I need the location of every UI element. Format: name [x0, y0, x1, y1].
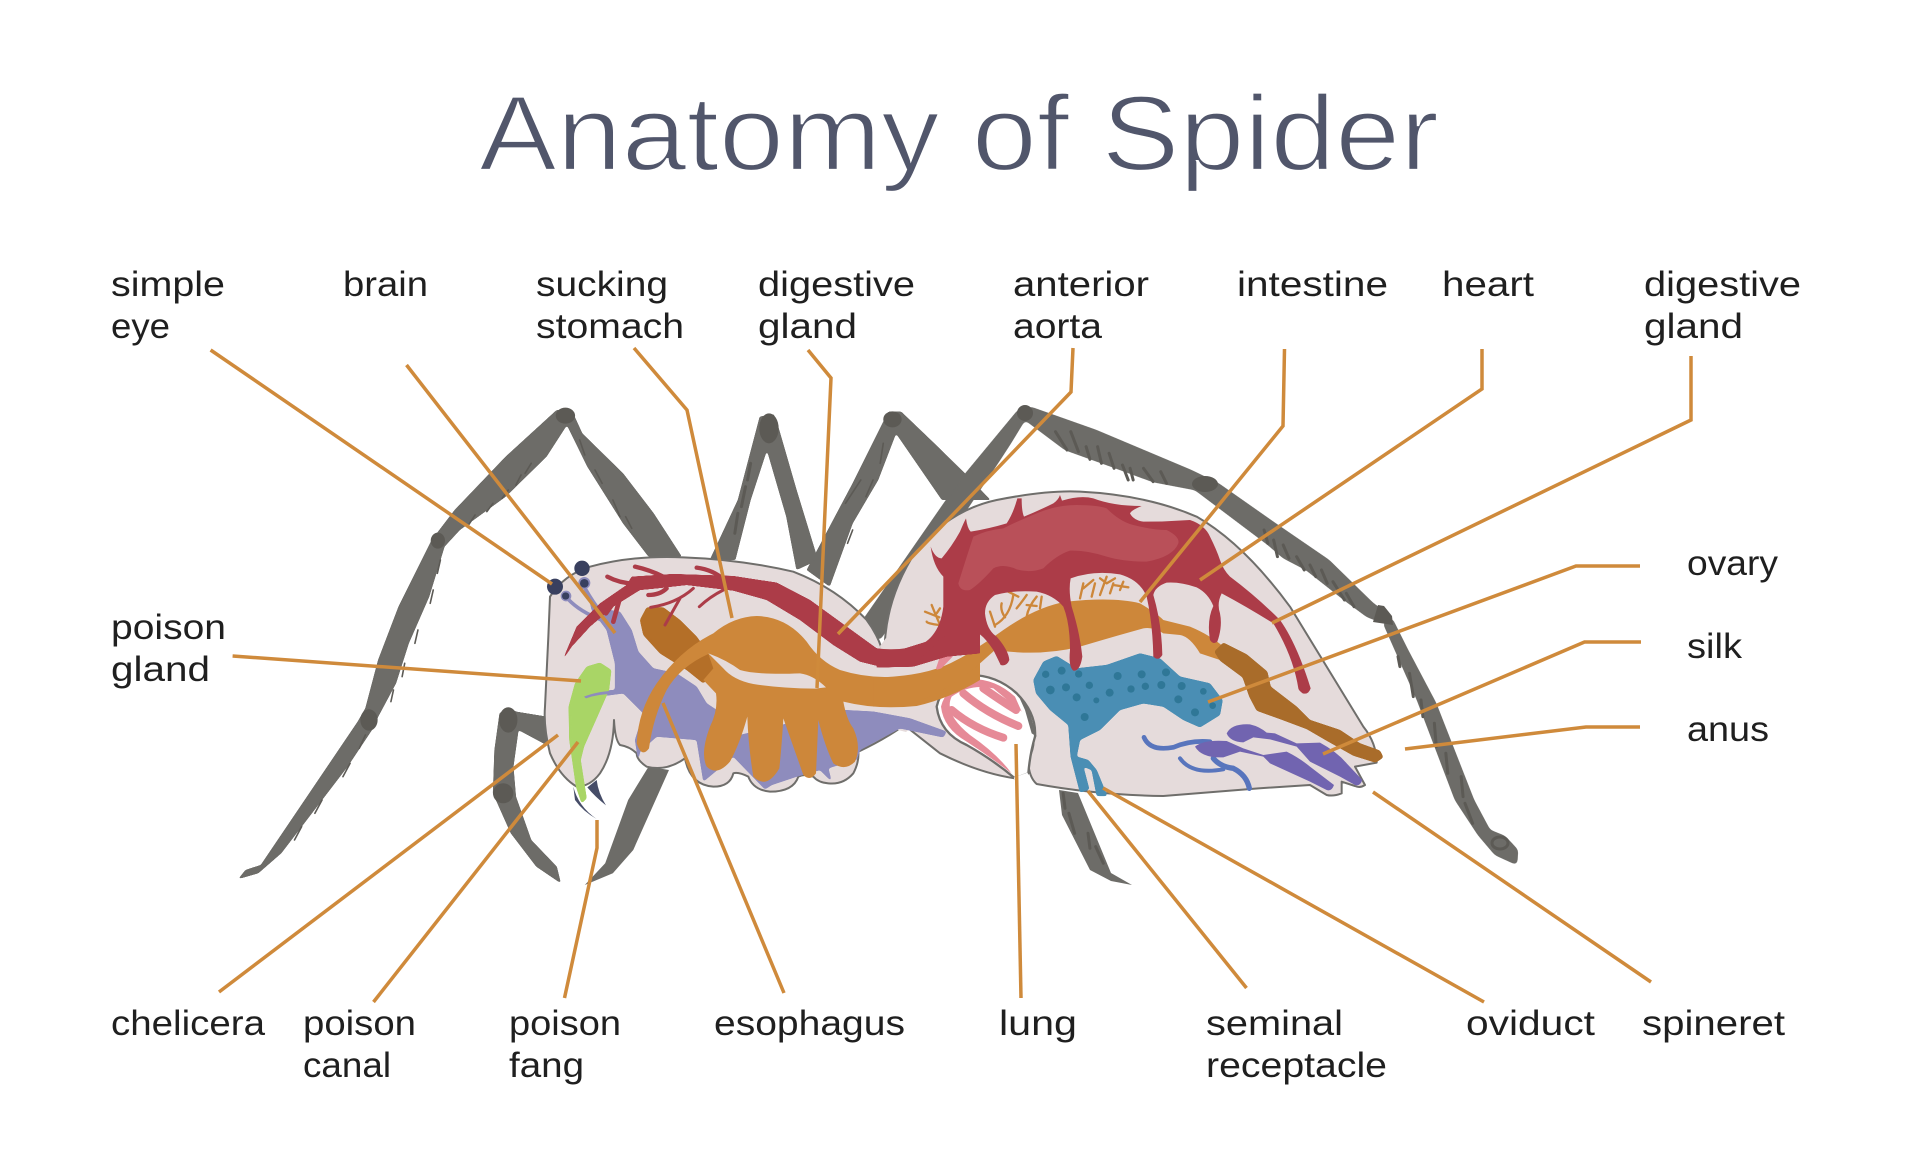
label: poison canal: [303, 1004, 416, 1085]
rear leg hairs: [1055, 432, 1473, 823]
label: poison fang: fang: [509, 1046, 584, 1085]
label: digestive gland: [758, 265, 915, 346]
leg: front lower leg: [585, 767, 669, 885]
waist connector: [880, 638, 912, 732]
label: digestive gland: gland: [758, 307, 857, 346]
anterior aorta tube: [563, 567, 980, 667]
ovary: [1033, 653, 1223, 796]
label: anterior aorta: anterior: [1013, 265, 1149, 304]
label: chelicera: chelicera: [111, 1004, 266, 1043]
aorta branches: [607, 567, 723, 595]
leg: front left long leg: [238, 408, 682, 879]
callout line: anus: [1405, 727, 1640, 749]
label: seminal receptacle: [1206, 1004, 1387, 1085]
callout line: esophagus: [663, 703, 784, 993]
callout line: seminal receptacle: [1088, 791, 1246, 988]
leg: second leg: [710, 413, 818, 570]
abdomen outline: [885, 491, 1377, 796]
label: heart: heart: [1442, 265, 1534, 304]
label: poison fang: [509, 1004, 621, 1085]
label: lung: lung: [999, 1004, 1077, 1043]
callout line: digestive gland front: [808, 350, 831, 688]
callout line: spineret: [1373, 792, 1651, 982]
label: silk: silk: [1687, 627, 1743, 666]
label: sucking stomach: sucking: [536, 265, 668, 304]
label: spineret: spineret: [1642, 1004, 1785, 1043]
heart and aorta: [563, 495, 1311, 694]
label: ovary: ovary: [1687, 544, 1779, 583]
label: poison canal: canal: [303, 1046, 391, 1085]
callout line: intestine: [1140, 349, 1284, 602]
heart body: [877, 495, 1311, 694]
purple nerve mass: [568, 585, 947, 789]
label: brain: brain: [343, 265, 428, 304]
label: anterior aorta: [1013, 265, 1149, 346]
label: digestive gland: digestive: [758, 265, 915, 304]
digestive gland branches: [925, 577, 1128, 627]
ovary eggs: [1042, 667, 1216, 721]
abdominal intestine: [873, 600, 1383, 763]
callout line: lung: [1016, 744, 1021, 998]
eye stalks: [568, 585, 602, 620]
callout line: silk: [1323, 642, 1641, 754]
pink tube: [936, 635, 956, 672]
label: anterior aorta: aorta: [1013, 307, 1103, 346]
label: esophagus: esophagus: [714, 1004, 905, 1043]
label: digestive gland rear: digestive: [1644, 265, 1801, 304]
label: seminal receptacle: receptacle: [1206, 1046, 1387, 1085]
label: poison canal: poison: [303, 1004, 416, 1043]
stomach opening: [708, 653, 826, 689]
label: simple eye: [111, 265, 225, 346]
callout line: digestive gland rear: [1272, 356, 1691, 623]
stomach and esophagus: [637, 616, 980, 782]
callout line: chelicera: [219, 735, 558, 992]
rectal brown tube: [1214, 643, 1383, 763]
leg: rear lower leg: [1059, 790, 1132, 885]
callout line: ovary: [1208, 566, 1640, 702]
label: intestine: intestine: [1237, 265, 1388, 304]
lung: [937, 675, 1037, 779]
callout line: brain: [406, 365, 615, 633]
label: sucking stomach: [536, 265, 684, 346]
spider legs: [238, 405, 1518, 885]
poison duct: [584, 691, 623, 698]
label: poison gland: poison: [111, 608, 226, 647]
label: anus: anus: [1687, 710, 1769, 749]
label: oviduct: oviduct: [1466, 1004, 1595, 1043]
callout line: sucking stomach: [634, 348, 732, 618]
label: simple eye: eye: [111, 307, 170, 346]
silk glands and spinnerets: [1195, 724, 1362, 790]
label: digestive gland rear: gland: [1644, 307, 1743, 346]
fangs: [573, 780, 606, 819]
label: poison fang: poison: [509, 1004, 621, 1043]
heart lighter chamber: [958, 505, 1179, 590]
callout line: oviduct: [1103, 788, 1484, 1002]
label: sucking stomach: stomach: [536, 307, 684, 346]
title: Anatomy of Spider: [479, 73, 1439, 193]
cephalothorax: [545, 557, 900, 792]
digestive gland brown lobe: [640, 607, 717, 683]
label: poison gland: gland: [111, 650, 210, 689]
callout line: simple eye: [211, 350, 552, 584]
poison gland green: [569, 663, 623, 803]
label: poison gland: [111, 608, 226, 689]
label: simple eye: simple: [111, 265, 225, 304]
callout line: poison fang: [564, 820, 597, 998]
label: digestive gland rear: [1644, 265, 1801, 346]
callout line: poison gland: [233, 656, 581, 681]
label: seminal receptacle: seminal: [1206, 1004, 1343, 1043]
body outline: head: [545, 557, 900, 792]
leg: third leg: [807, 411, 990, 587]
callout line: heart: [1200, 349, 1482, 580]
eyes: [547, 561, 590, 601]
silk ducts: [1144, 737, 1249, 788]
leg: pedipalp: [493, 707, 561, 883]
leg: rear long leg: [858, 405, 1518, 865]
callout line: anterior aorta: [838, 348, 1073, 634]
callout line: poison canal: [374, 742, 578, 1002]
